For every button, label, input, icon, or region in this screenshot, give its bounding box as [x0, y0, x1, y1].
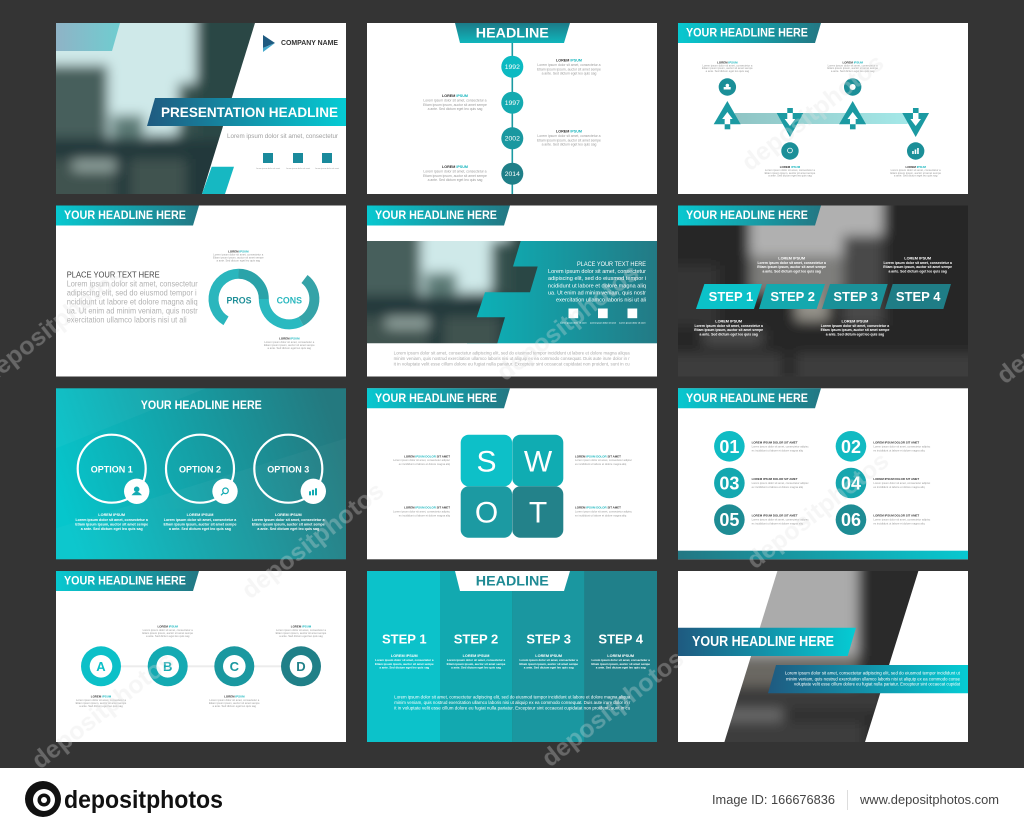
panel: six numbered items [678, 388, 968, 559]
panel: pros and cons [56, 206, 346, 376]
body text [67, 279, 198, 324]
footer text: Lorem ipsum dolor sit amet, consectetur adipiscing elit, sed do eiusmod tempor incididunt ut labore et dolore magna aliqua [394, 350, 630, 356]
headline: HEADLINE [476, 574, 549, 588]
step notes: LOREM IPSUM [391, 654, 418, 658]
item text [752, 440, 931, 526]
bottom paragraph [394, 694, 631, 710]
notes: a ante. Sed dictum eget leo quis sag [768, 174, 812, 178]
lettered rings [81, 646, 321, 686]
step notes: LOREM IPSUM [463, 654, 489, 658]
headline text: PRESENTATION HEADLINE [161, 104, 338, 120]
notes [76, 625, 327, 708]
blurred dark photo [678, 206, 968, 376]
notes: a ante. Sed dictum eget leo quis sag [268, 346, 312, 350]
headline tab [455, 23, 570, 43]
notes: Lorem ipsum dolor sit amet, consectetur a [252, 518, 326, 522]
company name: COMPANY NAME [281, 40, 338, 47]
notes: Lorem ipsum dolor sit amet, consectetur adipisc [393, 509, 451, 513]
notes: Lorem ipsum dolor sit amet, consectetur a [883, 261, 952, 265]
panel: timeline [367, 23, 657, 194]
header text: YOUR HEADLINE HERE [375, 208, 497, 222]
band text: Lorem ipsum dolor sit amet, consectetur adipiscing elit, sed do eiusmod tempor incididunt ut [785, 671, 961, 676]
header tab [678, 388, 821, 408]
header text: YOUR HEADLINE HERE [686, 26, 808, 40]
connecting band [735, 113, 908, 124]
headline: YOUR HEADLINE HERE [692, 634, 834, 650]
header text: YOUR HEADLINE HERE [64, 208, 186, 222]
timeline notes: LOREM IPSUM [442, 94, 468, 98]
step notes: a ante. Sed dictum eget leo quis sag [451, 666, 501, 670]
PROS label: PROS [227, 295, 252, 305]
timeline notes: LOREM IPSUM [556, 58, 582, 62]
notes: Etiam ipsum ipsum, auctor sit amet sempe [252, 522, 325, 526]
bottom paragraph: minim veniam, quis nostrud exercitation ullamco laboris nisi ut aliquip ex ea commodo consequat. Duis aute irure dolor in r [394, 700, 631, 705]
notes: Lorem ipsum dolor sit amet, consectetur a [821, 324, 889, 328]
icon circles [719, 78, 924, 160]
icon row [568, 308, 637, 318]
step notes: a ante. Sed dictum eget leo quis sag [524, 666, 574, 670]
letters: B [163, 659, 172, 674]
notes: Lorem ipsum dolor sit amet, consectetur a [757, 261, 826, 265]
year nodes: 1992 [505, 64, 520, 71]
item text: ex incididunt ut labore et dolore magna aliq [752, 522, 803, 526]
notes [702, 60, 941, 178]
timeline notes: a ante. Sed dictum eget leo quis sag [428, 178, 483, 182]
S curve [214, 274, 314, 324]
notes: Etiam ipsum ipsum, auctor sit amet sempe [827, 66, 878, 70]
notes: Lorem ipsum dolor sit amet, consectetur a [209, 698, 260, 702]
notes: Lorem ipsum dolor sit amet, consectetur a [264, 340, 315, 344]
notes: LOREM IPSUM DOLOR SIT AMET [575, 506, 621, 510]
item text: LOREM IPSUM DOLOR SIT AMET [752, 440, 798, 444]
blurred photo [724, 571, 918, 742]
notes: Lorem ipsum dolor sit amet, consectetur a [76, 698, 127, 702]
notes: LOREM IPSUM [187, 513, 213, 517]
header tab [367, 388, 510, 408]
block text [548, 269, 646, 304]
item text: LOREM IPSUM DOLOR SIT AMET [873, 477, 919, 481]
bottom paragraph: Lorem ipsum dolor sit amet, consectetur adipiscing elit, sed do eiusmod tempor incididunt ut labore et dolore magna aliqua [394, 694, 631, 700]
icon badges [124, 479, 326, 504]
numbers: 05 [719, 510, 739, 530]
step labels: STEP 2 [770, 289, 815, 304]
step titles: STEP 1 [382, 632, 427, 647]
notes: Etiam ipsum ipsum, auctor sit amet sempe [757, 265, 826, 269]
notes [75, 513, 326, 531]
notes: Lorem ipsum dolor sit amet, consectetur adipisc [575, 458, 633, 462]
notes: a ante. Sed dictum eget leo quis sag [146, 634, 190, 638]
notes: LOREM IPSUM [842, 320, 868, 324]
item text: Lorem ipsum dolor sit amet, consectetur adipisc [873, 444, 931, 448]
notes: a ante. Sed dictum eget leo quis sag [213, 704, 257, 708]
connector [101, 665, 301, 667]
notes: Etiam ipsum ipsum, auctor sit amet sempe [821, 328, 889, 332]
timeline notes: Etiam ipsum ipsum, auctor sit amet sempe [537, 138, 601, 142]
notes: a ante. Sed dictum eget leo quis sag [79, 704, 123, 708]
notes: Lorem ipsum dolor sit amet, consectetur a [75, 518, 149, 522]
notes: LOREM IPSUM [778, 256, 805, 260]
top left accent [56, 23, 120, 51]
SWOT letters: T [529, 496, 547, 529]
block text: exercitation ullamco laboris nisi ut ali [556, 298, 646, 304]
icon captions: Lorem ipsum dolor sit amet [315, 167, 340, 170]
block text: adipiscing elit, sed do eiusmod tempor i [548, 276, 646, 282]
notes: a ante. Sed dictum eget leo quis sag [257, 527, 319, 531]
item text: ex incididunt ut labore et dolore magna aliq [873, 522, 925, 526]
body text: ncididunt ut labore et dolore magna aliq [67, 296, 198, 306]
notes: LOREM IPSUM [275, 513, 302, 517]
steps diagram [694, 256, 952, 336]
notes: ex incididunt ut labore et dolore magna aliq [575, 513, 627, 517]
SWOT letters [475, 445, 553, 529]
notes: Etiam ipsum ipsum, auctor sit amet sempe [890, 171, 941, 175]
item text: Lorem ipsum dolor sit amet, consectetur adipisc [873, 518, 931, 522]
timeline notes [423, 58, 601, 182]
icon captions: Lorem ipsum dolor sit amet [590, 322, 616, 324]
numbered list [714, 431, 931, 535]
band text [785, 671, 961, 687]
image id: Image ID: 166676836 [712, 793, 835, 807]
timeline notes: Lorem ipsum dolor sit amet, consectetur a [423, 98, 487, 102]
timeline notes: LOREM IPSUM [556, 130, 582, 134]
option labels: OPTION 3 [267, 464, 309, 474]
watermark: depositphotos [236, 477, 389, 605]
option labels [91, 464, 309, 474]
notes: a ante. Sed dictum eget leo quis sag [826, 332, 884, 336]
watermark: depositphotos [736, 49, 889, 177]
notes: Etiam ipsum ipsum, auctor sit amet sempe [694, 328, 763, 332]
blurred city photo [367, 241, 538, 344]
block text: ua. Ut enim ad minim veniam, quis nostr [548, 291, 646, 297]
timeline notes: LOREM IPSUM [442, 165, 468, 169]
notes [694, 256, 952, 336]
panel: three options [56, 388, 346, 559]
timeline notes: a ante. Sed dictum eget leo quis sag [428, 107, 483, 111]
notes: Lorem ipsum dolor sit amet, consectetur a [276, 628, 327, 632]
item text: LOREM IPSUM DOLOR SIT AMET [873, 514, 919, 518]
notes: Lorem ipsum dolor sit amet, consectetur a [143, 628, 193, 632]
process diagram [702, 60, 941, 178]
timeline notes: Lorem ipsum dolor sit amet, consectetur a [423, 170, 487, 174]
SWOT letters: O [475, 496, 498, 529]
notes: LOREM IPSUM [842, 60, 863, 64]
icon captions: Lorem ipsum dolor sit amet [256, 167, 281, 170]
watermark: depositphotos [26, 647, 179, 775]
year nodes: 2002 [505, 136, 520, 143]
block text: ncididunt ut labore et dolore magna aliq [548, 284, 646, 290]
numbers: 03 [719, 473, 739, 493]
panel: cover slide [56, 23, 346, 194]
CONS label: CONS [277, 295, 302, 305]
letters: D [296, 659, 306, 674]
notes: ex incididunt ut labore et dolore magna aliq [399, 462, 451, 466]
panel: four steps on dark photo [678, 206, 968, 376]
notes: LOREM IPSUM [228, 250, 249, 254]
notes: Etiam ipsum ipsum, auctor sit amet sempe [702, 66, 753, 70]
header text: YOUR HEADLINE HERE [686, 391, 808, 405]
block text: Lorem ipsum dolor sit amet, consectetur [548, 269, 646, 275]
notes: Etiam ipsum ipsum, auctor sit amet sempe [142, 631, 194, 635]
step notes: Etiam ipsum ipsum, auctor sit amet sempe [591, 662, 650, 666]
notes [393, 454, 633, 518]
item text: ex incididunt ut labore et dolore magna aliq [752, 485, 803, 489]
notes: a ante. Sed dictum eget leo quis sag [762, 269, 821, 273]
body heading: PLACE YOUR TEXT HERE [67, 270, 160, 280]
notes: a ante. Sed dictum eget leo quis sag [699, 332, 758, 336]
step notes: Lorem ipsum dolor sit amet, consectetur a [592, 658, 650, 662]
timeline notes: Etiam ipsum ipsum, auctor sit amet sempe [423, 174, 487, 178]
notes: a ante. Sed dictum eget leo quis sag [169, 527, 231, 531]
header text: YOUR HEADLINE HERE [686, 208, 808, 222]
header tab [56, 571, 199, 591]
footer text: minim veniam, quis nostrud exercitation ullamco laboris nisi ut aliquip ex ea commodo consequat. Duis aute irure dolor in r [394, 356, 630, 361]
item text: Lorem ipsum dolor sit amet, consectetur adipisc [873, 481, 931, 485]
watermark: depositphotos [536, 645, 689, 773]
numbers: 04 [841, 473, 861, 493]
numbers [719, 437, 861, 530]
notes: Lorem ipsum dolor sit amet, consectetur a [702, 64, 753, 68]
numbers: 01 [719, 437, 739, 457]
body text: adipiscing elit, sed do eiusmod tempor i [67, 288, 197, 298]
notes: LOREM IPSUM DOLOR SIT AMET [404, 454, 450, 458]
teal block [467, 241, 657, 343]
headline band [147, 98, 346, 126]
header tab [678, 23, 821, 43]
circle glyphs [724, 84, 919, 154]
item text: ex incididunt ut labore et dolore magna aliq [752, 448, 803, 452]
notes: Etiam ipsum ipsum, auctor sit amet sempe [213, 256, 264, 260]
timeline notes: Lorem ipsum dolor sit amet, consectetur a [537, 63, 601, 67]
notes: Etiam ipsum ipsum, auctor sit amet sempe [164, 522, 236, 526]
step notes: Lorem ipsum dolor sit amet, consectetur a [447, 658, 506, 662]
item text: ex incididunt ut labore et dolore magna aliq [873, 448, 925, 452]
notes: a ante. Sed dictum eget leo quis sag [279, 634, 323, 638]
icon captions: Lorem ipsum dolor sit amet [619, 322, 646, 324]
step chevrons [696, 284, 951, 309]
notes: Etiam ipsum ipsum, auctor sit amet sempe [765, 171, 816, 175]
step notes: Lorem ipsum dolor sit amet, consectetur a [520, 658, 578, 662]
panel: photo with text [367, 206, 657, 376]
header text: YOUR HEADLINE HERE [375, 391, 497, 405]
notes: a ante. Sed dictum eget leo quis sag [831, 69, 875, 73]
notes: LOREM IPSUM [905, 165, 926, 169]
notes: LOREM IPSUM [904, 256, 931, 260]
notes: Lorem ipsum dolor sit amet, consectetur a [694, 324, 763, 328]
SWOT letters: W [524, 445, 553, 478]
number circles [714, 431, 866, 535]
step titles [382, 632, 644, 647]
icon row [263, 153, 332, 163]
notes: Etiam ipsum ipsum, auctor sit amet sempe [276, 631, 327, 635]
footer logo text: depositphotos [64, 786, 223, 814]
step titles: STEP 4 [598, 632, 644, 647]
panel: arrows process [678, 23, 968, 194]
step titles: STEP 2 [454, 632, 498, 647]
footer divider [847, 790, 848, 810]
notes: a ante. Sed dictum eget leo quis sag [217, 259, 261, 263]
icon captions: Lorem ipsum dolor sit amet [286, 167, 311, 170]
step notes [375, 654, 650, 670]
icon captions: Lorem ipsum dolor sit amet [560, 322, 587, 324]
step notes: Lorem ipsum dolor sit amet, consectetur a [375, 658, 434, 662]
band text: minim veniam, quis nostrud exercitation ullamco laboris nisi ut aliquip ex ea commodo conse [786, 676, 961, 681]
step notes: LOREM IPSUM [607, 654, 634, 658]
SWOT tiles [461, 435, 563, 538]
panel: closing slide [678, 571, 968, 742]
notes: Lorem ipsum dolor sit amet, consectetur adipisc [393, 458, 451, 462]
year nodes: 1997 [505, 100, 520, 107]
headline band [678, 628, 856, 656]
text band [768, 665, 968, 693]
step notes: Etiam ipsum ipsum, auctor sit amet sempe [519, 662, 578, 666]
notes [213, 250, 315, 350]
column fills [367, 571, 657, 742]
notes: LOREM IPSUM [224, 694, 245, 698]
notes: LOREM IPSUM [279, 336, 300, 340]
footer bar [678, 551, 968, 559]
panel: SWOT [367, 388, 657, 559]
notes: Etiam ipsum ipsum, auctor sit amet sempe [75, 522, 148, 526]
block heading: PLACE YOUR TEXT HERE [577, 261, 647, 268]
notes: ex incididunt ut labore et dolore magna aliq [575, 462, 627, 466]
item text: Lorem ipsum dolor sit amet, consectetur adipisc [752, 481, 809, 485]
notes: Lorem ipsum dolor sit amet, consectetur adipisc [575, 509, 633, 513]
notes: Etiam ipsum ipsum, auctor sit amet sempe [76, 701, 127, 705]
timeline notes: a ante. Sed dictum eget leo quis sag [542, 143, 597, 147]
step notes: Etiam ipsum ipsum, auctor sit amet sempe [375, 662, 434, 666]
timeline notes: Lorem ipsum dolor sit amet, consectetur a [537, 134, 601, 138]
footer text: it in voluptate velit esse cillum dolore eu fugiat nulla pariatur. Excepteur sint occaecat cupidatat non proident, sunt in cu [394, 362, 630, 366]
step notes: a ante. Sed dictum eget leo quis sag [379, 666, 429, 670]
footer logo icon [25, 781, 61, 817]
notes: a ante. Sed dictum eget leo quis sag [81, 527, 143, 531]
step notes: LOREM IPSUM [535, 654, 562, 658]
notes: Lorem ipsum dolor sit amet, consectetur a [765, 168, 815, 172]
band text: voluptate velit esse cillum dolore eu fugiat nulla pariatur. Excepteur sint occaecat cupidat [794, 682, 961, 687]
step labels: STEP 3 [833, 289, 878, 304]
item text: LOREM IPSUM DOLOR SIT AMET [752, 477, 798, 481]
panel: four step columns [367, 571, 657, 742]
notes: LOREM IPSUM DOLOR SIT AMET [404, 506, 450, 510]
notes: LOREM IPSUM [780, 165, 801, 169]
step labels: STEP 4 [896, 289, 941, 304]
letters: A [96, 659, 106, 674]
notes: a ante. Sed dictum eget leo quis sag [888, 269, 947, 273]
year nodes [501, 56, 523, 185]
timeline notes: Etiam ipsum ipsum, auctor sit amet sempe [423, 103, 487, 107]
background facets [56, 388, 346, 559]
timeline notes: a ante. Sed dictum eget leo quis sag [542, 72, 597, 76]
footer text [394, 350, 630, 366]
step labels: STEP 1 [709, 289, 753, 304]
headline: HEADLINE [476, 26, 549, 40]
notes: a ante. Sed dictum eget leo quis sag [894, 174, 938, 178]
step labels [709, 289, 941, 304]
notes: LOREM IPSUM [717, 60, 738, 64]
item text: Lorem ipsum dolor sit amet, consectetur adipisc [752, 518, 809, 522]
numbers: 02 [841, 437, 861, 457]
notes: LOREM IPSUM [715, 320, 742, 324]
year nodes: 2014 [505, 171, 520, 178]
footer band [0, 768, 1024, 832]
body text: Lorem ipsum dolor sit amet, consectetur [67, 279, 198, 289]
notes: ex incididunt ut labore et dolore magna aliq [399, 513, 451, 517]
option rings [78, 435, 322, 503]
step notes: Etiam ipsum ipsum, auctor sit amet sempe [447, 662, 506, 666]
headline tab [455, 571, 570, 591]
body text: exercitation ullamco laboris nisi ut ali [67, 314, 187, 324]
bottom paragraph: it in voluptate velit esse cillum dolore eu fugiat nulla pariatur. Excepteur sint occaecat cupidatat non proident, sunt in cu [394, 705, 630, 710]
notes: LOREM IPSUM [291, 625, 312, 629]
notes: LOREM IPSUM [157, 625, 178, 629]
header tab [367, 206, 510, 226]
notes: a ante. Sed dictum eget leo quis sag [706, 69, 750, 73]
item text: Lorem ipsum dolor sit amet, consectetur adipisc [752, 444, 809, 448]
item text: LOREM IPSUM DOLOR SIT AMET [752, 514, 798, 518]
letters: C [230, 659, 240, 674]
step titles: STEP 3 [526, 632, 571, 647]
notes: Etiam ipsum ipsum, auctor sit amet sempe [209, 701, 260, 705]
notes: Etiam ipsum ipsum, auctor sit amet sempe [264, 343, 315, 347]
logo triangle [263, 35, 275, 52]
body text: ua. Ut enim ad minim veniam, quis nostr [67, 305, 198, 315]
icon captions [256, 167, 340, 170]
notes: LOREM IPSUM [91, 694, 112, 698]
header tab [56, 206, 199, 226]
notes: Lorem ipsum dolor sit amet, consectetur a [828, 64, 878, 68]
subtitle: Lorem ipsum dolor sit amet, consectetur [227, 133, 338, 140]
notes: LOREM IPSUM DOLOR SIT AMET [575, 454, 621, 458]
notes: Lorem ipsum dolor sit amet, consectetur a [891, 168, 941, 172]
timeline notes: Etiam ipsum ipsum, auctor sit amet sempe [537, 67, 601, 71]
option labels: OPTION 2 [179, 464, 221, 474]
title: YOUR HEADLINE HERE [141, 398, 262, 412]
arrow markers [714, 101, 929, 137]
item text: LOREM IPSUM DOLOR SIT AMET [873, 440, 919, 444]
notes: Lorem ipsum dolor sit amet, consectetur a [213, 253, 264, 257]
badge glyphs [132, 486, 317, 495]
timeline axis [512, 43, 513, 194]
header tab [678, 206, 821, 226]
panel: ABCD process [56, 571, 346, 742]
SWOT letters: S [476, 445, 497, 478]
notes: Lorem ipsum dolor sit amet, consectetur a [164, 518, 237, 522]
header text: YOUR HEADLINE HERE [64, 574, 186, 588]
numbers: 06 [841, 510, 861, 530]
option labels: OPTION 1 [91, 464, 133, 474]
icon captions [560, 322, 646, 324]
notes: Etiam ipsum ipsum, auctor sit amet sempe [883, 265, 952, 269]
watermark: depositphotos [741, 447, 894, 575]
letters [96, 659, 306, 674]
bottom accent [202, 167, 234, 194]
notes: LOREM IPSUM [98, 513, 125, 517]
blurred city photo [56, 23, 255, 194]
step notes: a ante. Sed dictum eget leo quis sag [596, 666, 646, 670]
item text: ex incididunt ut labore et dolore magna aliq [873, 485, 925, 489]
watermark: depositphotos [491, 259, 644, 387]
site url: www.depositphotos.com [859, 793, 999, 807]
